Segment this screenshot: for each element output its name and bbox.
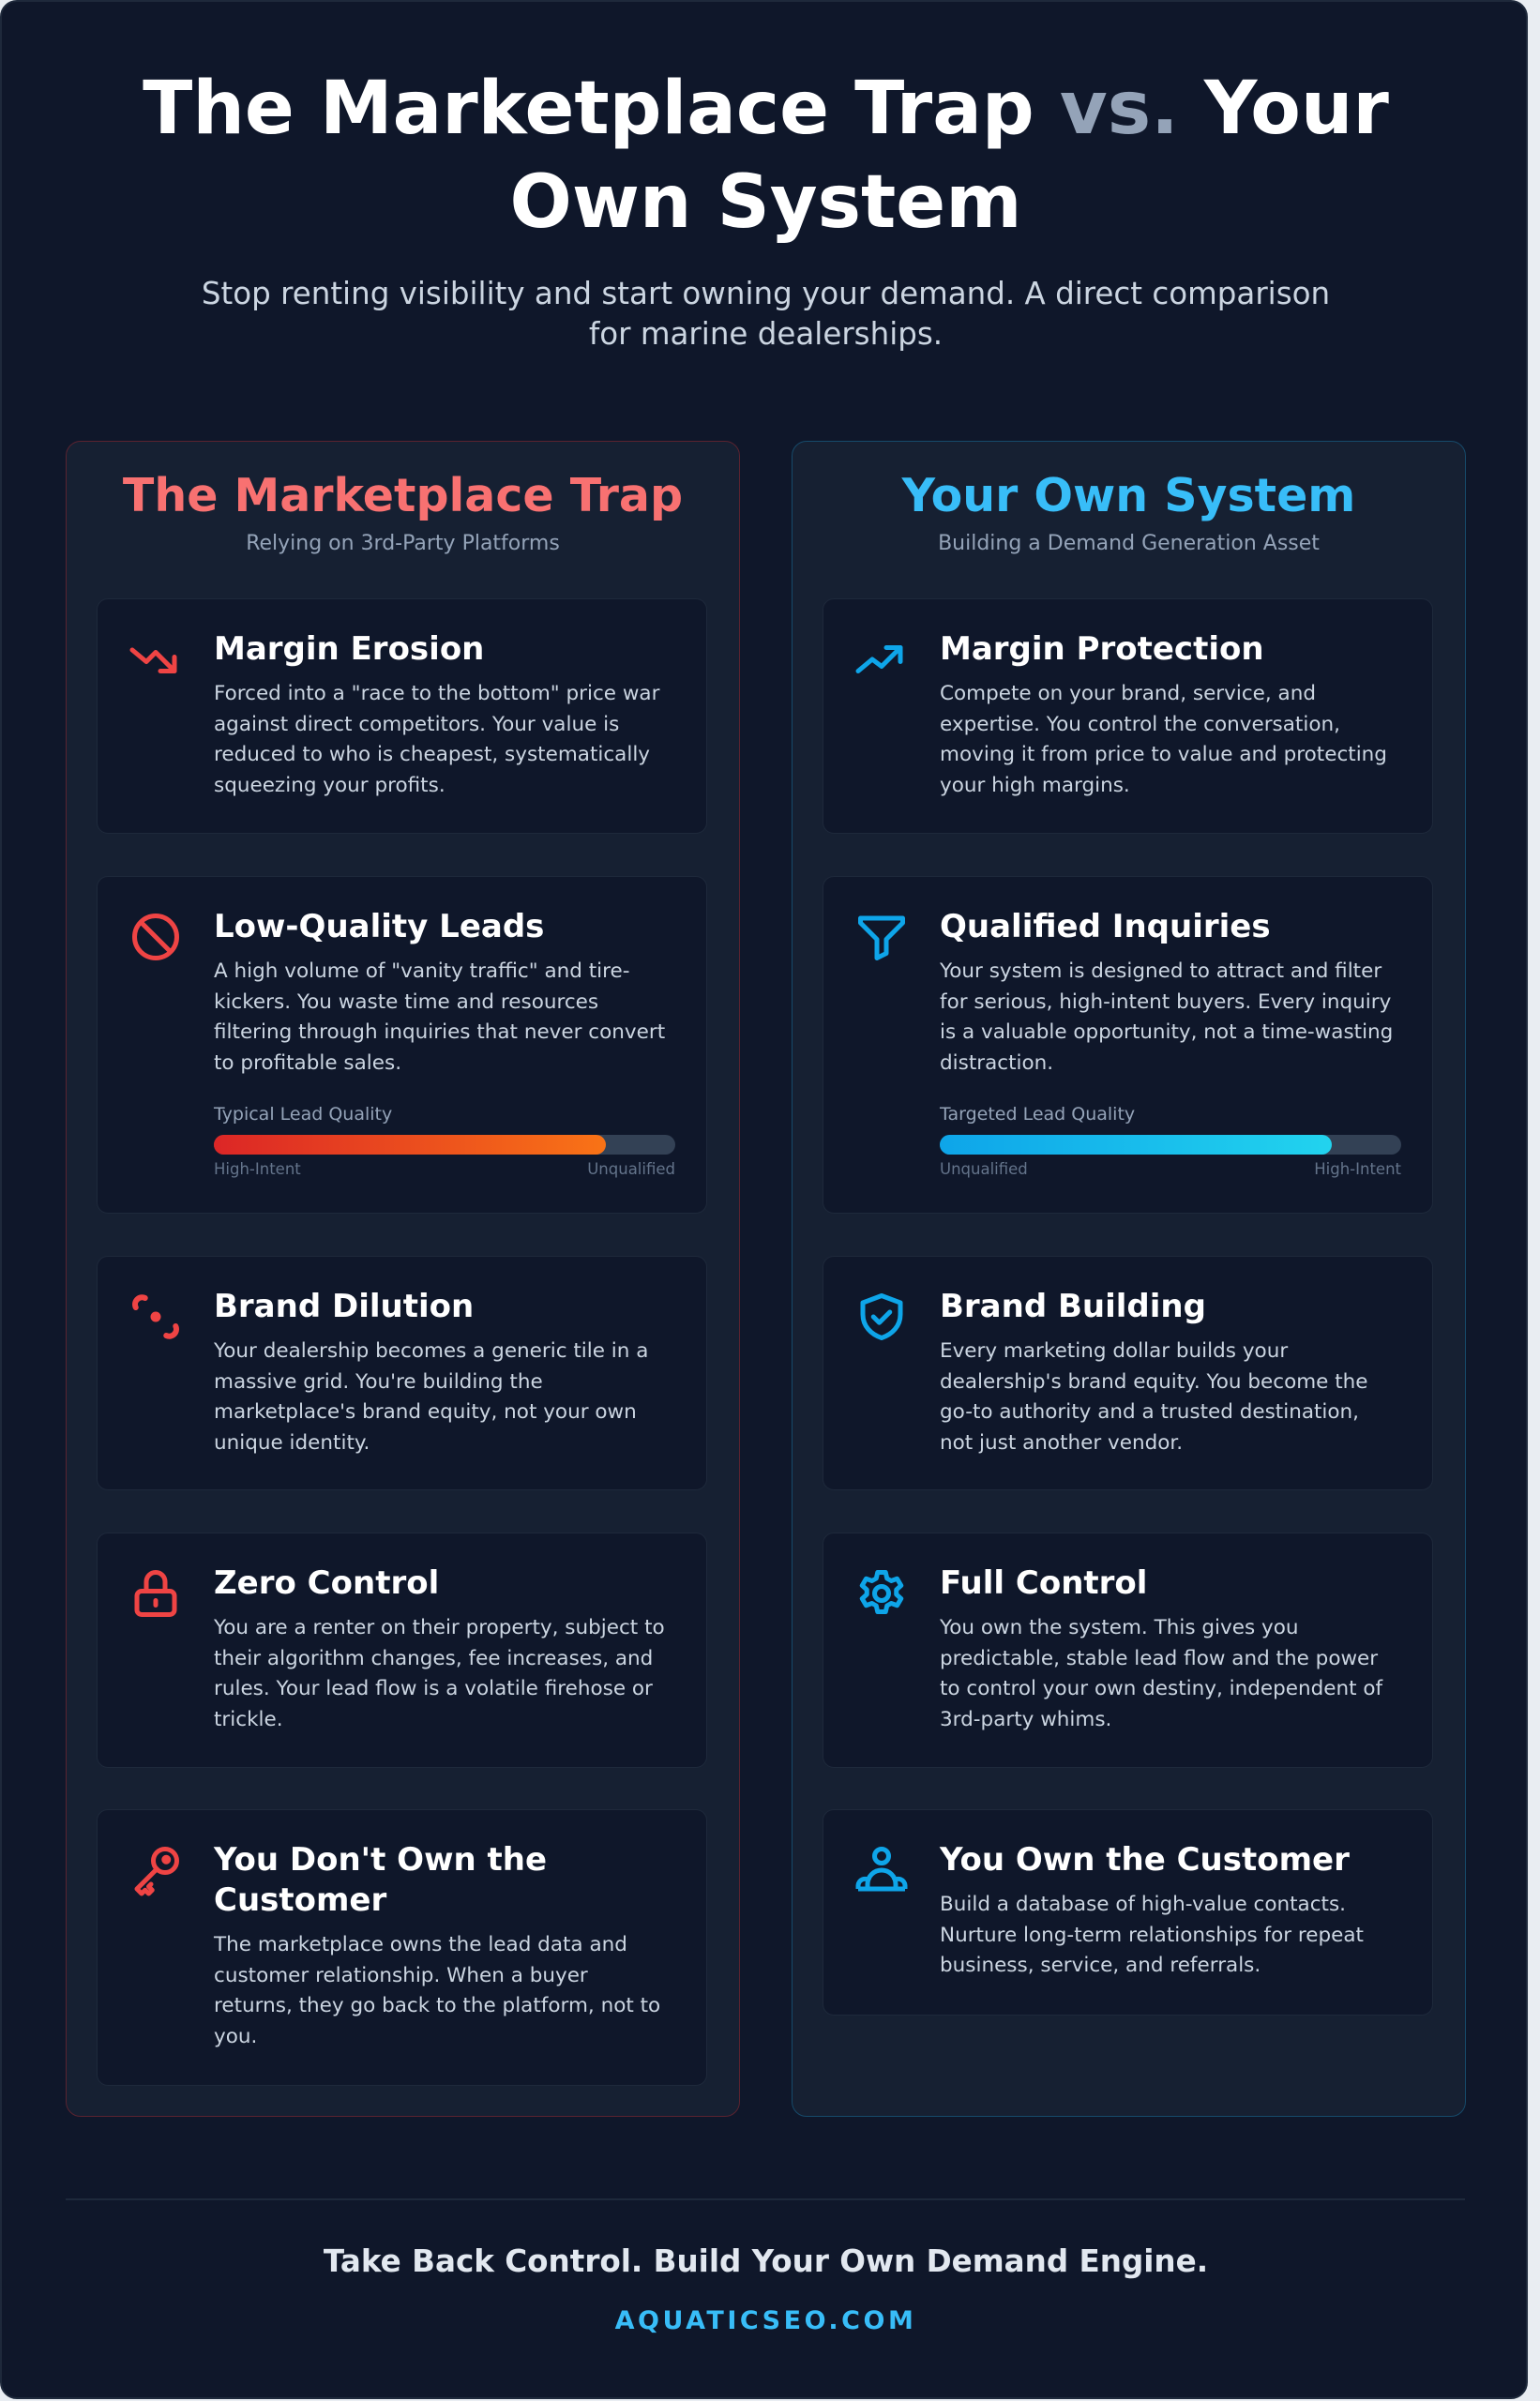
panel subheading: Building a Demand Generation Asset	[938, 532, 1320, 555]
card: don't own customer: You Don't Own the Customer	[214, 1841, 547, 1919]
lead quality bar: Unqualified	[587, 1160, 675, 1178]
card: don't own customer: The marketplace owns the lead data and customer relationship. When a buyer	[214, 1933, 627, 1987]
card: margin protection: Margin Protection	[940, 630, 1264, 668]
icon: lock	[135, 1570, 176, 1617]
icon: broken link	[132, 1294, 179, 1339]
card: qualified inquiries: Qualified Inquiries	[940, 908, 1271, 945]
icon: trending up	[855, 645, 902, 673]
subtitle: for marine dealerships.	[589, 316, 943, 352]
panel heading: Your Own System	[902, 469, 1355, 522]
lead quality bar	[940, 1104, 1401, 1178]
icon: key	[135, 1847, 179, 1896]
card: full control: You own the system. This gives you predictable, stable lead flow and the power to control your own destiny, independent of 3rd-party whims.	[940, 1616, 1382, 1731]
footer url: AQUATICSEO.COM	[615, 2306, 916, 2335]
icon: shield check	[861, 1293, 902, 1340]
icon: funnel	[858, 915, 905, 960]
title: Own System	[510, 160, 1021, 245]
card: low-quality leads	[97, 876, 707, 1214]
card: brand dilution: Brand Dilution	[214, 1288, 474, 1325]
icon: no symbol	[132, 914, 179, 960]
title: The Marketplace Trap vs. Your	[143, 67, 1389, 151]
footer tagline: Take Back Control. Build Your Own Demand Engine.	[324, 2243, 1208, 2279]
panel: own system	[792, 441, 1466, 2117]
card: margin erosion	[97, 598, 707, 834]
card: margin protection: Compete on your brand, service, and expertise. You control the conversation, moving it from price to value and protecting your high margins.	[940, 682, 1387, 797]
subtitle: Stop renting visibility and start owning your demand. A direct comparison	[202, 276, 1330, 311]
title	[143, 67, 1389, 245]
card: margin erosion: Forced into a "race to the bottom" price war against direct competitors. Your value is reduced to who is cheapest, systematically squeezing your profits.	[214, 682, 659, 797]
card: qualified inquiries	[823, 876, 1433, 1214]
card: own customer	[823, 1809, 1433, 2016]
panel: marketplace trap	[66, 441, 740, 2117]
lead quality bar: High-Intent	[1314, 1160, 1401, 1178]
card: own customer: Build a database of high-value contacts. Nurture long-term relationships for repeat business, service, and referrals.	[940, 1893, 1364, 1977]
card: brand building: not just another vendor.	[940, 1431, 1183, 1455]
card: brand building: Brand Building	[940, 1288, 1206, 1325]
card: margin erosion: Margin Erosion	[214, 630, 484, 668]
icon: user	[855, 1847, 908, 1891]
lead quality bar: Targeted Lead Quality	[940, 1104, 1135, 1125]
card: own customer: You Own the Customer	[940, 1841, 1350, 1879]
card: low-quality leads: A high volume of "vanity traffic" and tire-kickers. You waste time and resources filtering through inquiries that never convert to profitable sales.	[214, 959, 665, 1075]
card: zero control	[97, 1533, 707, 1768]
lead quality bar: Unqualified	[940, 1160, 1028, 1178]
subtitle	[202, 276, 1330, 352]
card: zero control: You are a renter on their property, subject to their algorithm changes, fee increases, and rules. Your lead flow is a volatile firehose or trickle.	[214, 1616, 665, 1731]
panel heading: The Marketplace Trap	[123, 469, 683, 522]
card: brand building	[823, 1256, 1433, 1490]
lead quality bar: High-Intent	[214, 1160, 301, 1178]
card: brand dilution: Your dealership becomes a generic tile in a massive grid. You're building the marketplace's brand equity, not your own unique identity.	[214, 1339, 648, 1455]
card: full control: Full Control	[940, 1564, 1147, 1602]
card: margin protection	[823, 598, 1433, 834]
card: don't own customer: returns, they go back to the platform, not to you.	[214, 1994, 660, 2048]
icon: gear	[859, 1570, 904, 1614]
card: don't own customer	[97, 1809, 707, 2086]
card: zero control: Zero Control	[214, 1564, 439, 1602]
card: full control	[823, 1533, 1433, 1768]
icon: trending down	[129, 647, 176, 673]
panel subheading: Relying on 3rd-Party Platforms	[246, 532, 560, 555]
card: brand dilution	[97, 1256, 707, 1490]
lead quality bar	[214, 1104, 675, 1178]
card: low-quality leads: Low-Quality Leads	[214, 908, 544, 945]
card: brand building: Every marketing dollar builds your dealership's brand equity. You become the go-to authority and a trusted destination,	[940, 1339, 1368, 1424]
card: qualified inquiries: Your system is designed to attract and filter for serious, high-intent buyers. Every inquiry is a valuable opportunity, not a time-wasting distraction.	[940, 959, 1393, 1075]
lead quality bar: Typical Lead Quality	[214, 1104, 392, 1125]
